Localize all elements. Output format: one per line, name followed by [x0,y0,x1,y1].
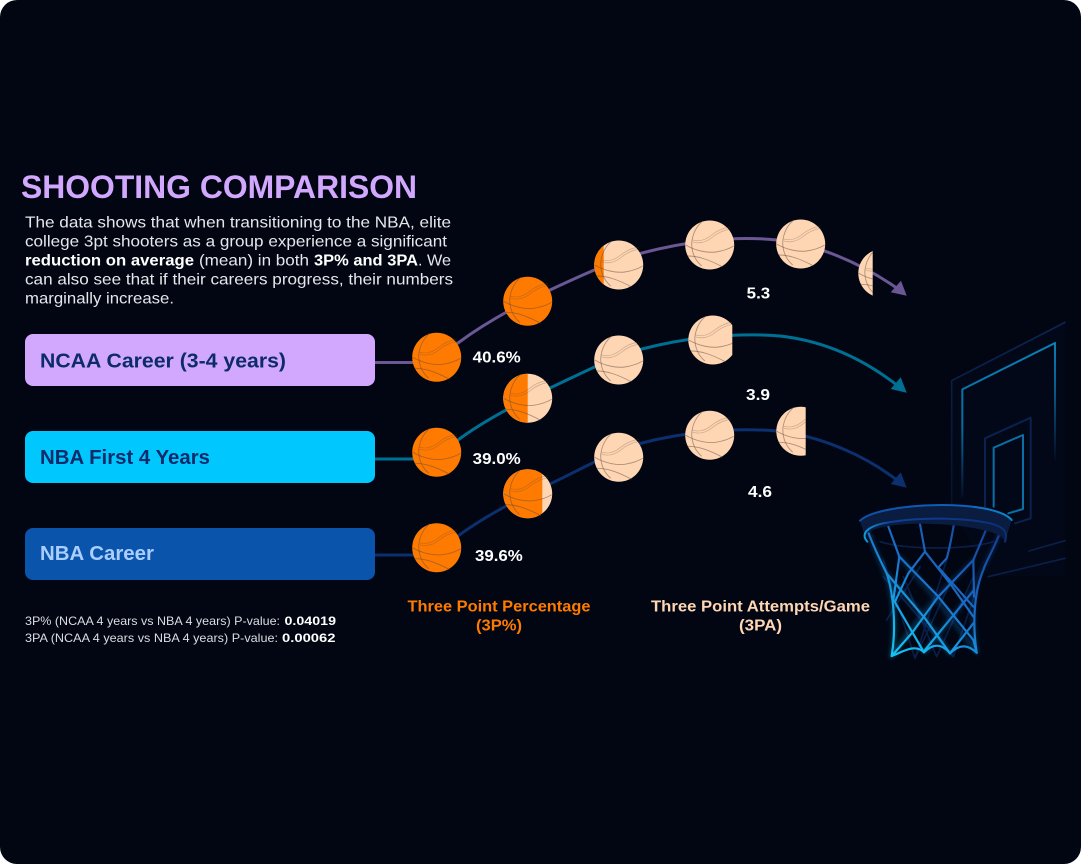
description text: 3P% and 3PA [314,252,418,270]
p-value notes: 0.04019 [284,614,336,628]
axis label: Three Point Attempts/Game: (3PA) [739,618,782,635]
balls row: NCAA Career [412,220,907,382]
label: NBA Career: NBA Career [40,543,154,565]
arrow: NBA First 4 Years trajectory [375,335,907,459]
description text: The data shows that when transitioning to the NBA, elite [25,214,451,232]
description text: reduction on average [25,252,194,270]
label: NBA Career [25,528,375,580]
value: 39.0%: 39.0% [473,451,521,468]
value: 3.9: 3.9 [746,387,770,404]
axis label: Three Point Percentage: (3P%) [476,618,522,635]
title: SHOOTING COMPARISON [21,169,417,205]
label: NBA First 4 Years [25,431,375,483]
axis label: Three Point Percentage: Three Point Percentage [408,599,591,616]
balls row: NBA First 4 Years [412,316,737,477]
value: 39.6%: 39.6% [475,548,523,565]
net glow [868,533,1000,656]
p-value notes: 0.00062 [282,631,336,645]
description text: college 3pt shooters as a group experience a significant [25,234,448,250]
p-value notes: 3P% (NCAA 4 years vs NBA 4 years) P-value: [25,614,280,628]
axis label: Three Point Percentage [408,599,591,635]
value: 40.6%: 40.6% [473,350,521,367]
description text: . We [418,252,451,270]
label: NCAA Career [25,334,375,386]
net strands [868,524,1000,656]
p-value notes [25,614,336,645]
description text: marginally increase. [25,290,174,308]
arrow: NBA Career trajectory [375,430,907,555]
back net [880,542,993,658]
axis label: Three Point Attempts/Game [651,599,870,635]
description text [25,214,453,308]
rim [860,505,1012,542]
axis label: Three Point Attempts/Game: Three Point Attempts/Game [651,599,870,616]
description text: can also see that if their careers progress, their numbers [25,272,453,288]
value: 4.6: 4.6 [748,484,772,501]
balls row: NBA Career [412,407,825,572]
backboard [952,322,1065,577]
arrow: NCAA Career trajectory [375,238,907,362]
label: NCAA Career: NCAA Career (3-4 years) [40,350,286,372]
p-value notes: 3PA (NCAA 4 years vs NBA 4 years) P-value: [25,631,278,645]
value: 5.3: 5.3 [747,286,771,303]
icon: basketball hoop [860,322,1065,658]
label: NBA First 4 Years: NBA First 4 Years [40,447,210,469]
description text: (mean) in both [199,252,309,270]
